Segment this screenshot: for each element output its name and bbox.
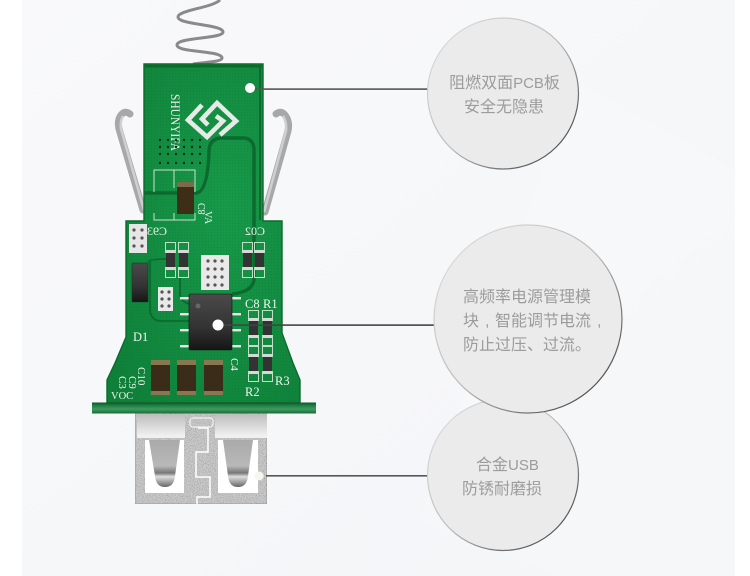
- USB centre zigzag slot: [196, 428, 210, 504]
- IC pin marker: [196, 304, 200, 308]
- board outline: [107, 64, 300, 403]
- text: 安全无隐患: [464, 98, 544, 116]
- callout 3: USB: [254, 400, 578, 550]
- black component: [132, 263, 148, 302]
- circle: [434, 225, 622, 413]
- IC body: [189, 294, 232, 350]
- anchor dot: [245, 83, 255, 93]
- silkscreen labels: C10: [135, 367, 147, 386]
- USB metal frame: [135, 413, 267, 504]
- silkscreen labels: D1: [133, 330, 148, 344]
- silkscreen labels: C3: [116, 376, 128, 389]
- board base band: [92, 402, 316, 414]
- PCB board: [92, 64, 316, 414]
- icon: left metal clip: [118, 112, 144, 210]
- IC chip: [180, 294, 241, 350]
- white pad block left: [129, 224, 147, 253]
- silkscreen labels: C4: [228, 358, 240, 371]
- connector line: [266, 475, 428, 477]
- silkscreen labels: VOC: [111, 391, 133, 402]
- text: 防锈耐磨损: [462, 480, 542, 498]
- white pad block small: [158, 287, 173, 311]
- silkscreen labels: C9: [126, 376, 138, 389]
- board dot texture: [107, 64, 300, 403]
- silkscreen labels: R3: [275, 374, 290, 388]
- text: 阻燃双面PCB板: [449, 75, 560, 92]
- icon: right metal clip: [264, 112, 289, 212]
- mirrored labels: C02: [245, 224, 265, 238]
- silkscreen labels: R2: [245, 385, 260, 399]
- connector line: [254, 88, 428, 90]
- mirrored labels: [147, 224, 265, 238]
- USB connector: [135, 413, 267, 504]
- icon: coil spring: [177, 0, 223, 64]
- silkscreen labels: [111, 297, 290, 402]
- resistor pair right: [242, 242, 264, 278]
- top edge shading: [145, 65, 262, 68]
- anchor dot: [254, 472, 264, 480]
- upper silkscreen labels: [197, 203, 213, 225]
- connector line: [222, 324, 436, 326]
- circle: [428, 18, 578, 169]
- logo: [188, 103, 236, 137]
- text: 块: [463, 312, 479, 330]
- text: 合金USB: [476, 457, 539, 474]
- text: 智能调节电流: [495, 312, 591, 330]
- USB left contact: [149, 440, 180, 487]
- IC legs: [180, 297, 241, 347]
- mirrored labels: C93: [147, 224, 167, 238]
- silkscreen labels: C8: [245, 297, 260, 311]
- capacitors: [151, 360, 223, 395]
- USB top slot: [190, 418, 213, 427]
- resistor stack: [248, 310, 272, 382]
- anchor dot: [212, 320, 224, 330]
- text: ,: [597, 313, 601, 330]
- USB right contact: [223, 440, 253, 487]
- white pad block centre: [201, 255, 229, 290]
- callout 1: PCB: [245, 18, 578, 169]
- text: ,: [485, 313, 489, 330]
- upper brown component: [177, 182, 194, 214]
- silkscreen labels: R1: [263, 297, 278, 311]
- upper silkscreen labels: C8: [197, 203, 208, 215]
- circle: [428, 400, 578, 550]
- USB contact windows: [145, 440, 258, 493]
- USB upper bars: [137, 414, 267, 438]
- text: 防止过压、过流。: [463, 336, 591, 354]
- upper silkscreen labels: VA: [202, 211, 213, 225]
- text: 高频率电源管理模: [463, 288, 591, 306]
- upper pad outlines: [154, 170, 195, 220]
- copper traces: [144, 65, 260, 321]
- resistor pair left: [166, 242, 188, 278]
- via dots: [159, 139, 201, 164]
- callout 2: power module: [212, 225, 622, 413]
- brand name: SHUNYIFA: [168, 94, 182, 151]
